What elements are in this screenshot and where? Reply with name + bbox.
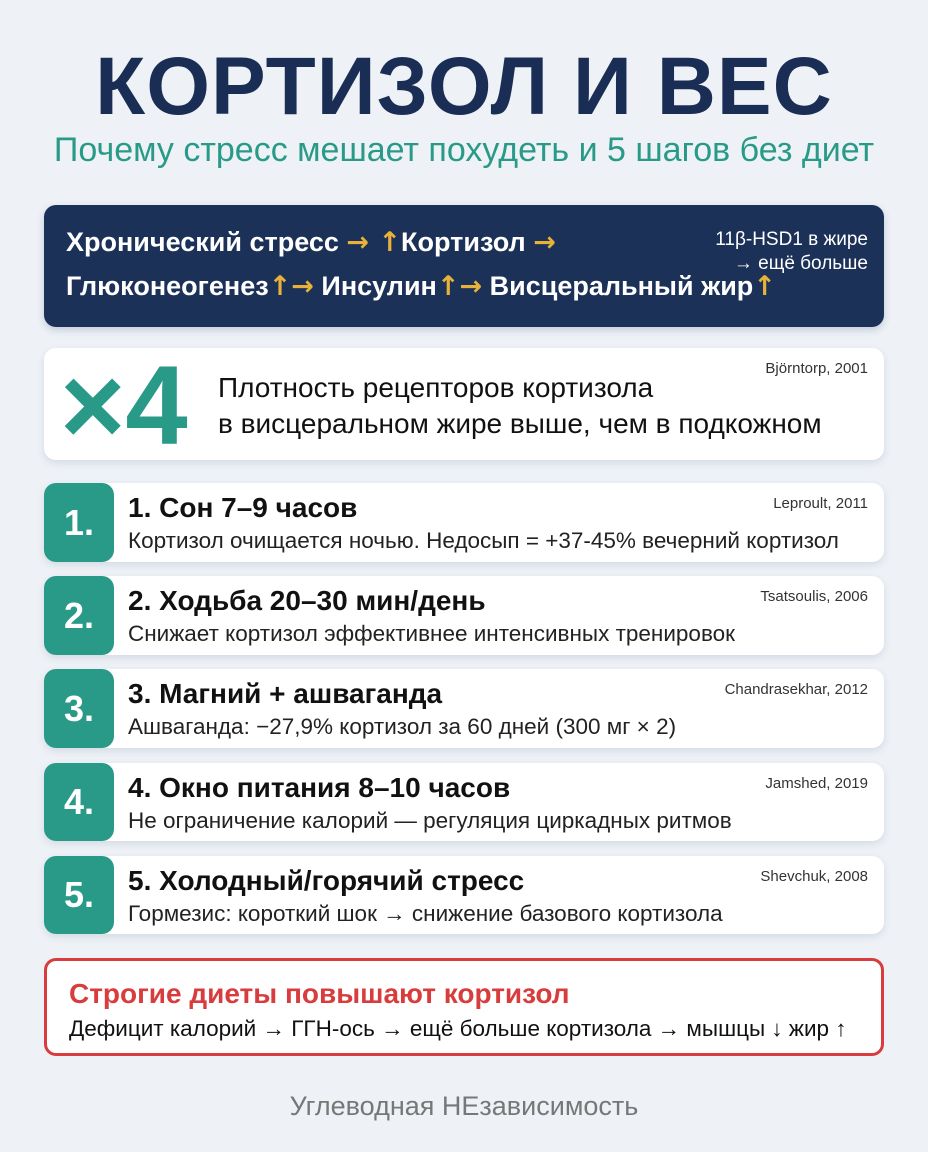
step 4 (44, 763, 884, 841)
panel: x4 fact: Björntorp, 2001 (765, 360, 868, 377)
warning text: Дефицит калорий → ГГН-ось → ещё больше кортизола → мышцы ↓ жир ↑ (69, 1016, 847, 1041)
step 1 (44, 483, 884, 562)
title: КОРТИЗОЛ И ВЕС (95, 41, 833, 132)
step 3: Ашваганда: −27,9% кортизол за 60 дней (300 мг × 2) (128, 714, 676, 739)
step 3 (44, 669, 884, 748)
panel: mechanism chain (44, 205, 884, 327)
step 4: Jamshed, 2019 (765, 775, 868, 792)
step 2: Tsatsoulis, 2006 (760, 588, 868, 605)
step 4: 4. (64, 781, 94, 822)
side note: → ещё больше (734, 253, 868, 274)
step 1: 1. Сон 7–9 часов (128, 492, 357, 523)
step 1: 1. (64, 502, 94, 542)
warning title: Строгие диеты повышают кортизол (69, 978, 570, 1009)
step 1: Leproult, 2011 (773, 495, 868, 512)
big number x4: ×4 (60, 343, 188, 468)
step 5 (44, 856, 884, 934)
step 5: Гормезис: короткий шок → снижение базового кортизола (128, 901, 723, 926)
step 2: Снижает кортизол эффективнее интенсивных тренировок (128, 621, 735, 646)
panel: x4 fact (44, 348, 884, 460)
fact text: Плотность рецепторов кортизола (218, 372, 653, 403)
step 1: Кортизол очищается ночью. Недосып = +37-45% вечерний кортизол (128, 528, 839, 553)
step 4: 4. Окно питания 8–10 часов (128, 772, 510, 803)
footer: Углеводная НЕзависимость (290, 1091, 638, 1121)
fact text (218, 372, 822, 439)
side note (715, 229, 868, 274)
step 3: 3. Магний + ашваганда (128, 678, 442, 709)
step 2 (44, 576, 884, 655)
step 2: 2. Ходьба 20–30 мин/день (128, 585, 486, 616)
chain line 2: Глюконеогенез↑→ Инсулин↑→ Висцеральный жир↑ (66, 271, 776, 302)
step 2: 2. (64, 594, 94, 636)
chain line 1: Хронический стресс → ↑Кортизол → (66, 227, 556, 258)
fact text: в висцеральном жире выше, чем в подкожном (218, 408, 822, 439)
side note: 11β-HSD1 в жире (715, 229, 868, 250)
step 5: 5. Холодный/горячий стресс (128, 865, 524, 896)
subtitle: Почему стресс мешает похудеть и 5 шагов без диет (54, 131, 874, 169)
step 5: 5. (64, 874, 94, 915)
step 5: Shevchuk, 2008 (760, 868, 868, 885)
step 3: 3. (64, 688, 94, 728)
warning box (44, 958, 884, 1056)
step 4: Не ограничение калорий — регуляция циркадных ритмов (128, 808, 732, 833)
step 3: Chandrasekhar, 2012 (725, 681, 868, 698)
